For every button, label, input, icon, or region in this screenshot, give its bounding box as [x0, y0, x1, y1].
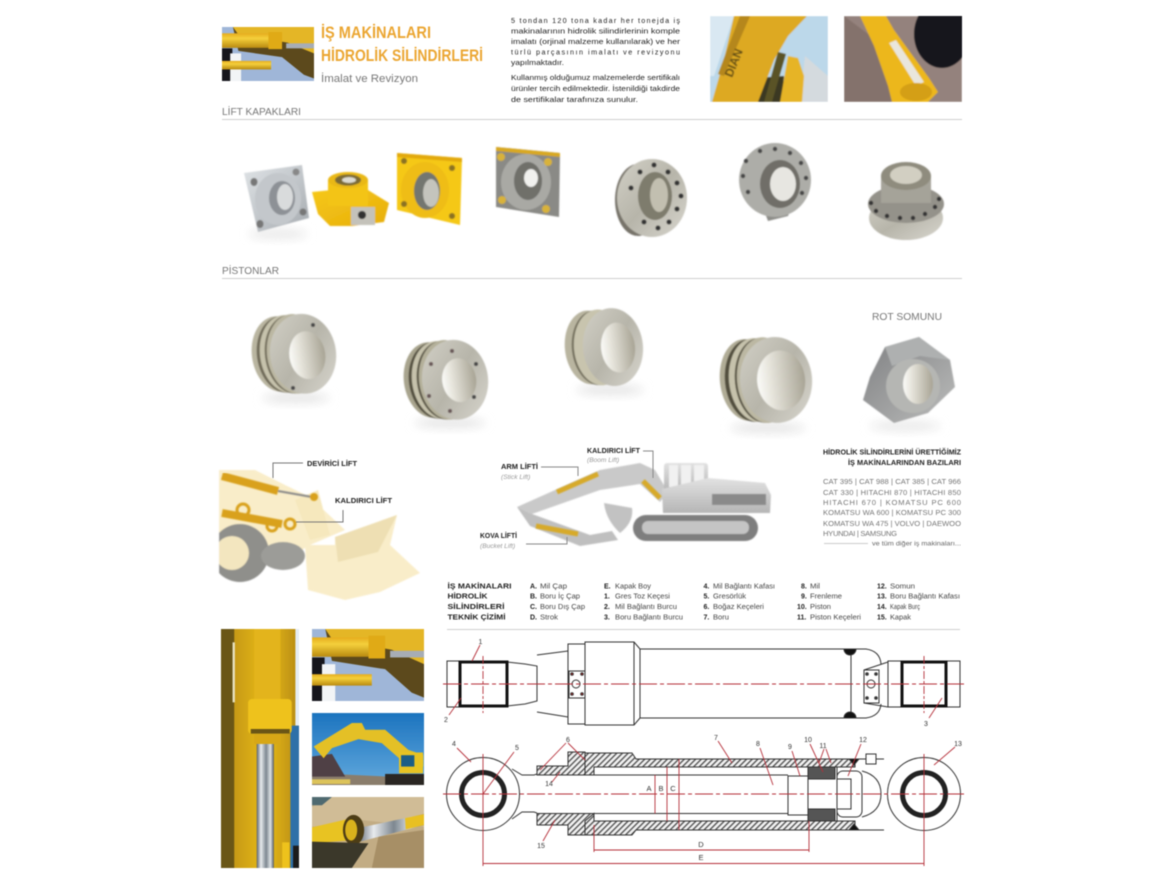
exterior view part numbers: 1	[479, 639, 483, 646]
label: kaldırıcı lift	[296, 496, 392, 522]
label: kova lifti: (Bucket Lift)	[480, 543, 515, 550]
intro text: ürünler tercih edilmektedir. İstenildiği takdirde	[511, 84, 680, 93]
label: rot somunu: ROT SOMUNU	[872, 312, 942, 323]
legend column 5: 15.	[877, 614, 887, 622]
section view labels: 8	[756, 741, 760, 748]
header photo: cylinders under boom	[221, 26, 315, 82]
section view labels	[452, 735, 962, 862]
label: arm lifti	[501, 462, 578, 481]
legend column 3: Mil Bağlantı Kafası	[713, 584, 775, 590]
section view labels: 10	[804, 737, 812, 744]
intro text: makinalarının hidrolik silindirlerinin komple	[511, 26, 680, 36]
legend column 2	[604, 584, 683, 622]
title	[321, 23, 483, 65]
legend column 4: Piston Keçeleri	[810, 614, 861, 622]
subtitle: İmalat ve Revizyon	[321, 72, 418, 85]
machine names: CAT 395 | CAT 988 | CAT 385 | CAT 966	[823, 477, 961, 486]
legend title: İŞ MAKİNALARI	[448, 582, 512, 590]
section heading: Lift Kapakları: LİFT KAPAKLARI	[222, 105, 301, 118]
piston and rod end	[788, 754, 884, 830]
label: kova lifti: KOVA LİFTİ	[480, 531, 517, 540]
section view red dimensions	[443, 741, 964, 866]
exterior view part numbers: 3	[924, 721, 928, 728]
part: piston 4	[716, 332, 816, 433]
technical drawing: section view	[446, 752, 960, 835]
panel: lift caps	[244, 143, 944, 240]
label: kaldırıcı lift: KALDIRICI LİFT	[335, 496, 392, 505]
legend column 1: Boru Dış Çap	[540, 604, 585, 611]
legend column 2: Mil Bağlantı Burcu	[615, 604, 677, 611]
legend column 2: E.	[604, 584, 611, 590]
section view labels: C	[670, 784, 676, 793]
photo: cylinder with chrome rod	[220, 628, 300, 869]
label: kaldırıcı lift (boom)	[587, 446, 653, 478]
legend title: HİDROLİK	[448, 592, 488, 600]
legend column 1: D.	[530, 614, 537, 622]
machine list heading: HİDROLİK SİLİNDİRLERİNİ ÜRETTİĞİMİZ	[823, 448, 961, 456]
label: devirici lift	[273, 459, 357, 478]
legend column 4: 8.	[801, 584, 807, 590]
part: piston 1	[247, 309, 341, 403]
legend column 5: Kapak	[890, 614, 912, 622]
legend column 4	[797, 584, 861, 622]
section view labels: D	[698, 840, 704, 849]
legend title: SİLİNDİRLERİ	[448, 602, 504, 611]
machine names: CAT 330 | HITACHI 870 | HITACHI 850	[823, 488, 961, 497]
legend column 4: 11.	[797, 614, 806, 622]
machine names: HITACHI 670 | KOMATSU PC 600	[823, 498, 961, 507]
technical drawing: exterior view	[447, 642, 960, 725]
machine names: KOMATSU WA 600 | KOMATSU PC 300	[823, 508, 961, 517]
legend column 3: Boru	[713, 614, 729, 622]
legend column 2: Kapak Boy	[615, 584, 652, 590]
photo: yellow arm on ground	[844, 15, 963, 103]
label: devirici lift: DEVİRİCİ LİFT	[307, 459, 357, 468]
photo column	[221, 629, 424, 868]
excavator cylinders	[536, 474, 660, 534]
legend column 3: Gresörlük	[713, 594, 747, 600]
legend column 3: 7.	[704, 614, 709, 622]
part: round bolted flange	[615, 159, 687, 237]
part: piston 3	[561, 305, 647, 395]
title: İŞ MAKİNALARI	[321, 23, 431, 42]
legend column 5: Somun	[890, 584, 915, 590]
loader cylinders	[222, 476, 318, 531]
part: rod nut	[863, 337, 955, 431]
photo: excavator against sky	[311, 712, 425, 786]
closing note: ve tüm diğer iş makinaları...	[872, 540, 961, 548]
gland and collar	[537, 642, 640, 725]
title: HİDROLİK SİLİNDİRLERİ	[321, 46, 483, 65]
intro text: de sertifikalar tarafınıza sunulur.	[511, 95, 638, 104]
legend column 4: Piston	[810, 604, 831, 611]
legend column 3: Boğaz Keçeleri	[713, 604, 764, 611]
photo: cylinders under boom	[311, 628, 425, 702]
part: yellow plate	[397, 153, 462, 225]
part: stepped bolted hub	[868, 162, 944, 240]
legend column 1: Strok	[540, 614, 559, 622]
photo: yellow boom with lettering: DIAN	[722, 47, 746, 79]
section view labels: 4	[452, 741, 456, 748]
legend column 2: Boru Bağlantı Burcu	[615, 614, 683, 622]
legend column 3: 5.	[704, 594, 709, 600]
intro text: Kullanmış olduğumuz malzemelerde sertifikalı	[511, 73, 680, 82]
excavator body	[517, 463, 771, 546]
legend column 1: A.	[530, 584, 537, 590]
section view labels: 5	[515, 745, 519, 752]
legend column 2: Gres Toz Keçesi	[615, 594, 670, 600]
section view labels: 6	[566, 737, 570, 744]
legend column 3: 4.	[704, 584, 709, 590]
part: piston 2	[399, 335, 493, 428]
section view labels: 9	[788, 744, 792, 751]
exterior view part numbers: 2	[444, 717, 448, 724]
section view labels: 14	[545, 781, 553, 788]
label: kaldırıcı lift (boom): (Boom Lift)	[587, 457, 619, 464]
legend column 4: Mil	[810, 584, 820, 590]
cylinder tube	[640, 649, 881, 718]
legend column 5: 13.	[877, 594, 887, 600]
part: flange with tab	[739, 143, 811, 221]
section view labels: B	[658, 784, 664, 793]
legend column 2: 2.	[604, 604, 610, 611]
tube section	[585, 753, 855, 835]
legend column 5: Kapak Burç	[890, 604, 920, 611]
section view labels: 15	[537, 843, 545, 850]
machine names: KOMATSU WA 475 | VOLVO | DAEWOO	[823, 519, 961, 528]
label: kova lifti	[480, 531, 567, 550]
legend column 1: Boru İç Çap	[540, 592, 580, 600]
panel: pistons	[247, 305, 955, 433]
part: steel square flange	[244, 165, 309, 239]
section view labels: 13	[954, 741, 962, 748]
label: arm lifti: (Stick Lift)	[501, 474, 530, 481]
exterior view part numbers	[444, 639, 928, 728]
legend column 1: Mil Çap	[540, 584, 567, 590]
gland section top and bottom	[537, 752, 594, 835]
machine list heading	[823, 448, 961, 467]
legend title	[448, 582, 512, 622]
section view labels: 12	[859, 737, 867, 744]
photo: cylinder on rock	[311, 796, 425, 869]
legend column 1: C.	[530, 604, 537, 611]
machine names: HYUNDAI | SAMSUNG	[823, 529, 897, 538]
legend column 4: 9.	[801, 594, 807, 600]
machine names	[823, 477, 961, 538]
left rod eye	[447, 661, 537, 707]
section heading: Pistonlar: PİSTONLAR	[222, 264, 279, 277]
rod	[537, 775, 788, 814]
section view labels: A	[646, 784, 652, 793]
legend column 4: 10.	[797, 604, 807, 611]
section view labels: 11	[819, 743, 827, 750]
part: yellow block	[312, 172, 389, 226]
part: dark plate with yellow holes	[496, 147, 560, 217]
right end eye	[864, 661, 960, 707]
legend column 4: Frenleme	[810, 594, 842, 600]
diagram: excavator	[480, 446, 771, 550]
section view labels: E	[698, 853, 704, 862]
intro text: imalatı (orjinal malzeme kullanılarak) ve her	[511, 37, 681, 46]
exterior view red axes	[443, 645, 964, 718]
rod eye right	[888, 758, 960, 830]
legend column 2: 3.	[604, 614, 610, 622]
legend column 5	[877, 584, 960, 622]
rod eye left	[446, 758, 537, 830]
intro text	[511, 16, 681, 104]
intro text: yapılmaktadır.	[511, 58, 564, 67]
legend column 1: B.	[530, 594, 537, 600]
header block	[222, 0, 970, 104]
label: kaldırıcı lift (boom): KALDIRICI LİFT	[587, 446, 640, 455]
legend column 3: 6.	[704, 604, 709, 611]
intro text: türlü parçasının imalatı ve revizyonu	[511, 48, 680, 56]
photo: yellow boom with lettering	[710, 15, 828, 103]
legend column 2: 1.	[604, 594, 610, 600]
loader body and bucket	[195, 440, 420, 610]
legend: technical drawing	[448, 582, 960, 622]
legend column 5: Boru Bağlantı Kafası	[890, 594, 960, 600]
intro text: 5 tondan 120 tona kadar her tonejda iş	[511, 16, 680, 25]
section view labels: 7	[714, 735, 718, 742]
legend column 5: 14.	[877, 604, 887, 611]
legend title: TEKNİK ÇİZİMİ	[448, 612, 506, 622]
panel: machine list	[823, 448, 961, 548]
machine list heading: İŞ MAKİNALARINDAN BAZILARI	[848, 458, 961, 467]
legend column 5: 12.	[877, 584, 887, 590]
legend column 3	[704, 584, 775, 622]
legend column 1	[530, 584, 585, 622]
label: arm lifti: ARM LİFTİ	[501, 462, 538, 471]
diagram: wheel loader	[195, 440, 420, 610]
